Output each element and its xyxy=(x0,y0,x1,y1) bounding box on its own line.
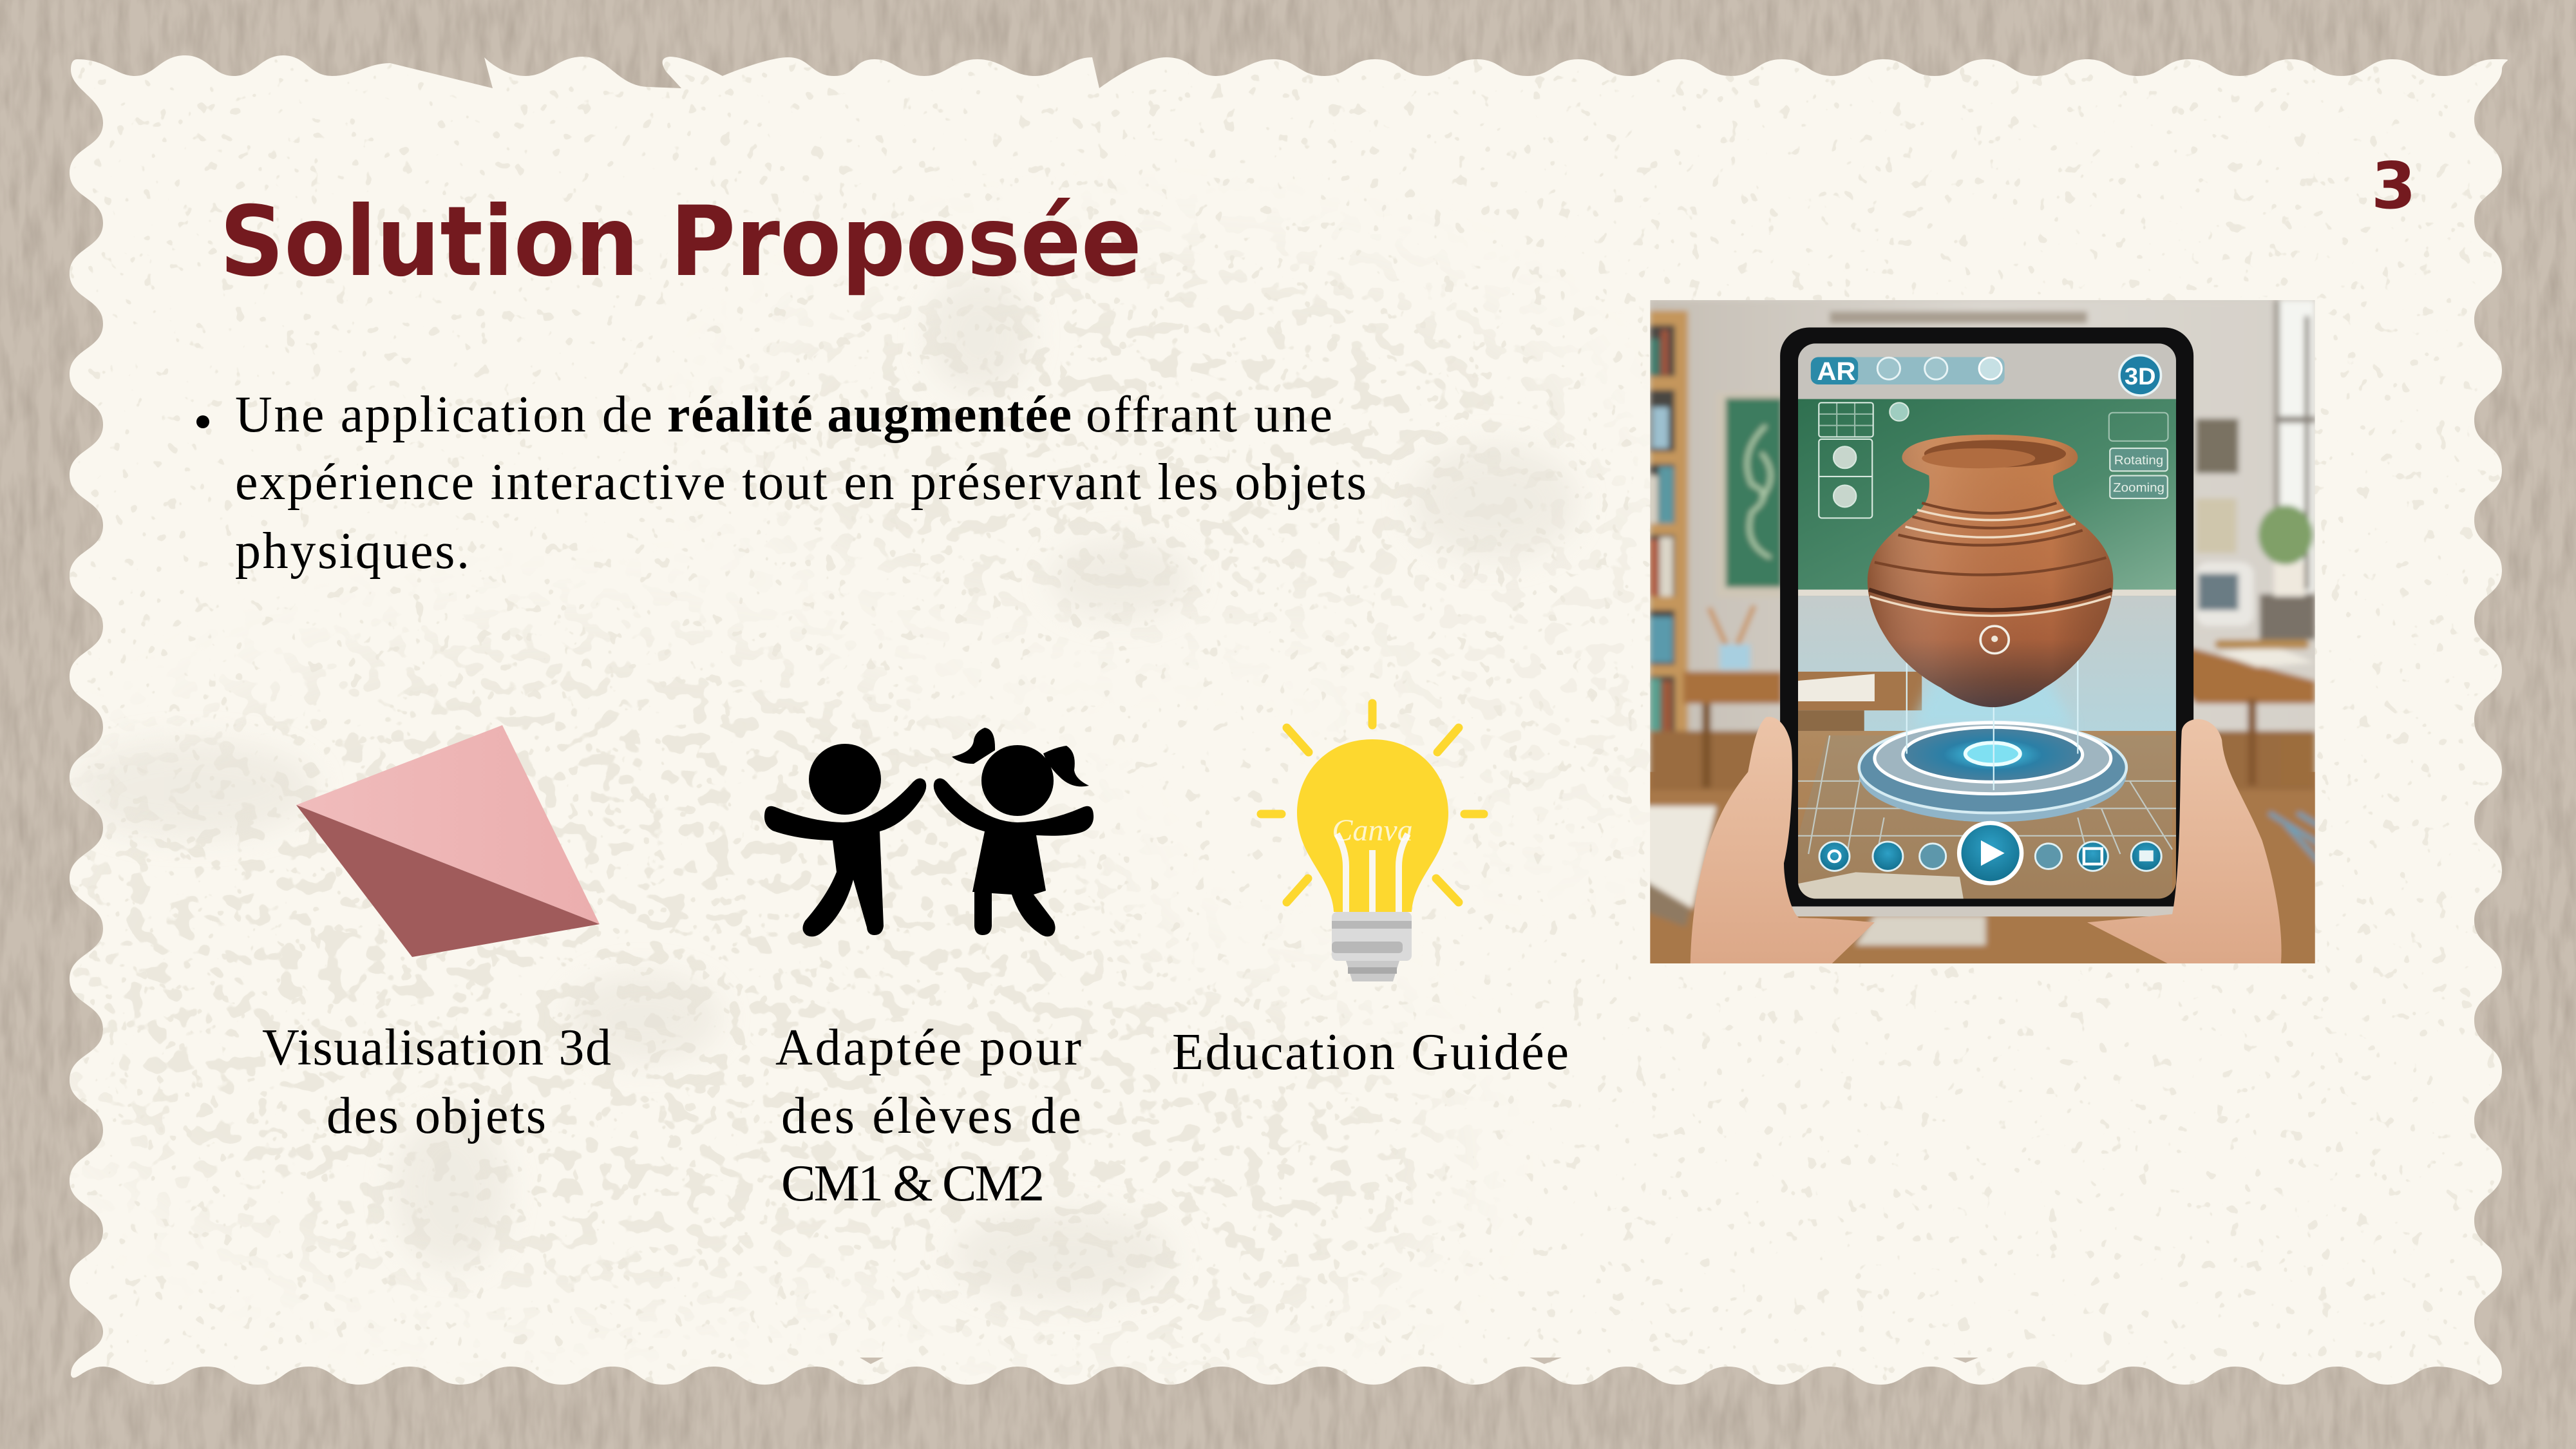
text block: bullet paragraph: Une application de xyxy=(235,386,652,443)
tablet screen xyxy=(1798,343,2176,898)
clay pot xyxy=(1868,435,2113,707)
AR side panels: Rotating xyxy=(2114,453,2163,468)
text block: bullet paragraph xyxy=(196,386,1367,580)
hologram platform xyxy=(1859,612,2126,822)
image: AR tablet with clay pot xyxy=(1638,300,2328,972)
label: adapted for pupils xyxy=(775,1019,1081,1212)
icon: two children xyxy=(764,728,1094,936)
tablet bezel xyxy=(1780,327,2193,916)
label: adapted for pupils: des élèves de xyxy=(781,1088,1081,1144)
label: guided education: Education Guidée xyxy=(1172,1024,1569,1081)
AR toolbar: AR xyxy=(1817,357,1856,386)
text block: bullet paragraph: expérience interactive tout en préservant les objets xyxy=(235,454,1367,511)
label: 3D visualisation xyxy=(262,1019,611,1144)
AR toolbar: 3D xyxy=(2125,363,2156,390)
icon: 3D polyhedron xyxy=(296,725,600,957)
AR side panels: Zooming xyxy=(2113,481,2164,495)
classroom background xyxy=(1638,300,2328,972)
page number: 3 xyxy=(2371,148,2416,223)
label: adapted for pupils: CM1 & CM2 xyxy=(781,1155,1045,1212)
icon: light bulb: Canva xyxy=(1332,813,1413,848)
AR side panels xyxy=(1819,402,2168,518)
text block: bullet paragraph: physiques. xyxy=(235,523,469,580)
title: Solution Proposée xyxy=(220,186,1142,298)
label: adapted for pupils: Adaptée pour xyxy=(775,1019,1081,1076)
AR toolbar xyxy=(1811,355,2161,395)
book on screen xyxy=(1798,872,1964,898)
text block: bullet paragraph: réalité augmentée xyxy=(667,386,1072,443)
control buttons xyxy=(1819,823,2161,883)
text block: bullet paragraph: offrant une xyxy=(1086,386,1332,443)
label: 3D visualisation: des objets xyxy=(327,1088,546,1144)
label: 3D visualisation: Visualisation 3d xyxy=(262,1019,611,1076)
hands xyxy=(1690,717,2282,963)
icon: light bulb xyxy=(1261,703,1484,981)
